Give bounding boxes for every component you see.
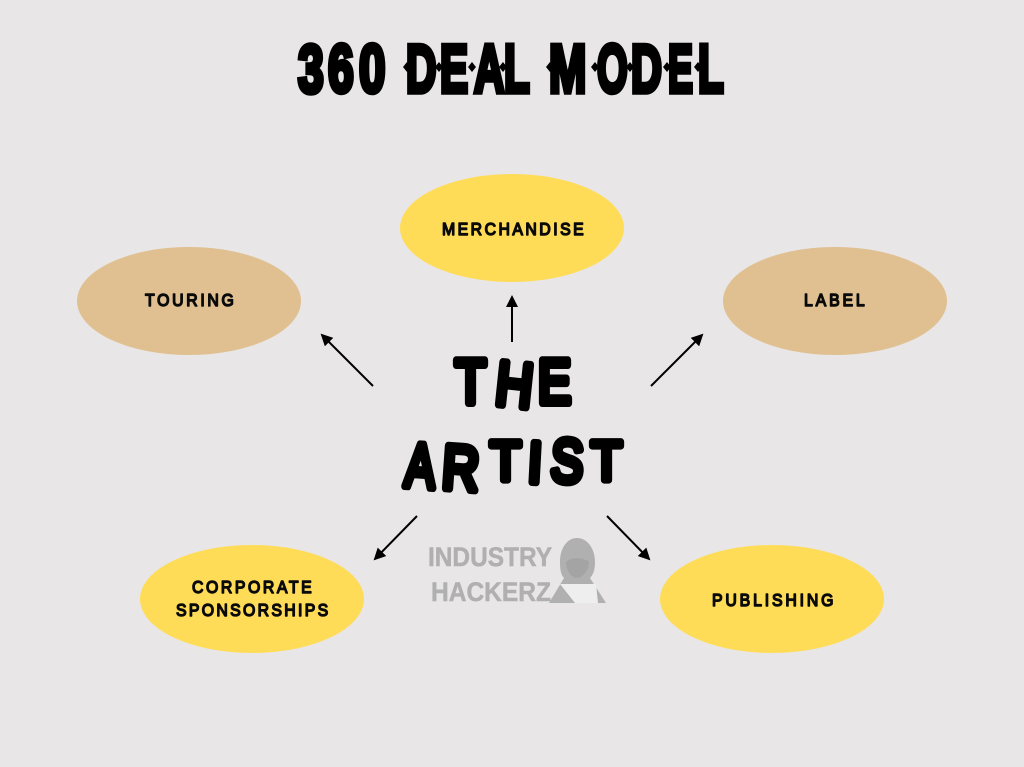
watermark: industry hackerz [428, 538, 606, 607]
icon: hooded figure [549, 538, 606, 603]
oval: touring [77, 247, 301, 355]
title: L [698, 31, 724, 106]
central text: the artist: R [440, 433, 481, 505]
central text: the artist: E [538, 347, 571, 416]
title: E [668, 30, 693, 107]
title: A [474, 31, 504, 106]
central text: the artist [403, 347, 622, 505]
central text: the artist: T [591, 431, 622, 493]
title: D [406, 31, 436, 106]
oval: publishing: PUBLISHING [712, 590, 833, 610]
title: 0 [359, 32, 385, 107]
watermark: industry hackerz: INDUSTRY [428, 542, 552, 572]
arrow: to touring [322, 335, 373, 386]
title: E [440, 31, 468, 106]
title: D [631, 32, 662, 108]
oval: merchandise [400, 174, 624, 282]
central text: the artist: S [549, 426, 585, 496]
central text: the artist: I [526, 430, 544, 495]
arrow: to publishing [607, 516, 649, 559]
title: 3 [298, 31, 324, 107]
arrow: to corporate sponsorships [375, 516, 417, 559]
central text: the artist: A [403, 431, 438, 502]
oval: label [723, 247, 947, 355]
oval: label: LABEL [804, 290, 865, 310]
arrow: to merchandise [511, 297, 513, 342]
title: 6 [328, 31, 354, 107]
central text: the artist: T [490, 431, 521, 493]
oval: corporate sponsorships [140, 545, 364, 653]
oval: touring: TOURING [145, 290, 234, 310]
oval: corporate sponsorships: SPONSORSHIPS [176, 600, 328, 620]
watermark: industry hackerz: HACKERZ [431, 577, 551, 607]
oval: merchandise: MERCHANDISE [442, 219, 584, 239]
title: M [549, 32, 586, 107]
title: L [504, 31, 530, 106]
central text: the artist: T [455, 348, 486, 417]
title [298, 30, 724, 108]
arrow: to label [651, 335, 702, 386]
oval: corporate sponsorships: CORPORATE [192, 577, 312, 597]
title: O [597, 31, 628, 107]
oval: publishing [660, 545, 884, 653]
central text: the artist: H [493, 350, 536, 422]
